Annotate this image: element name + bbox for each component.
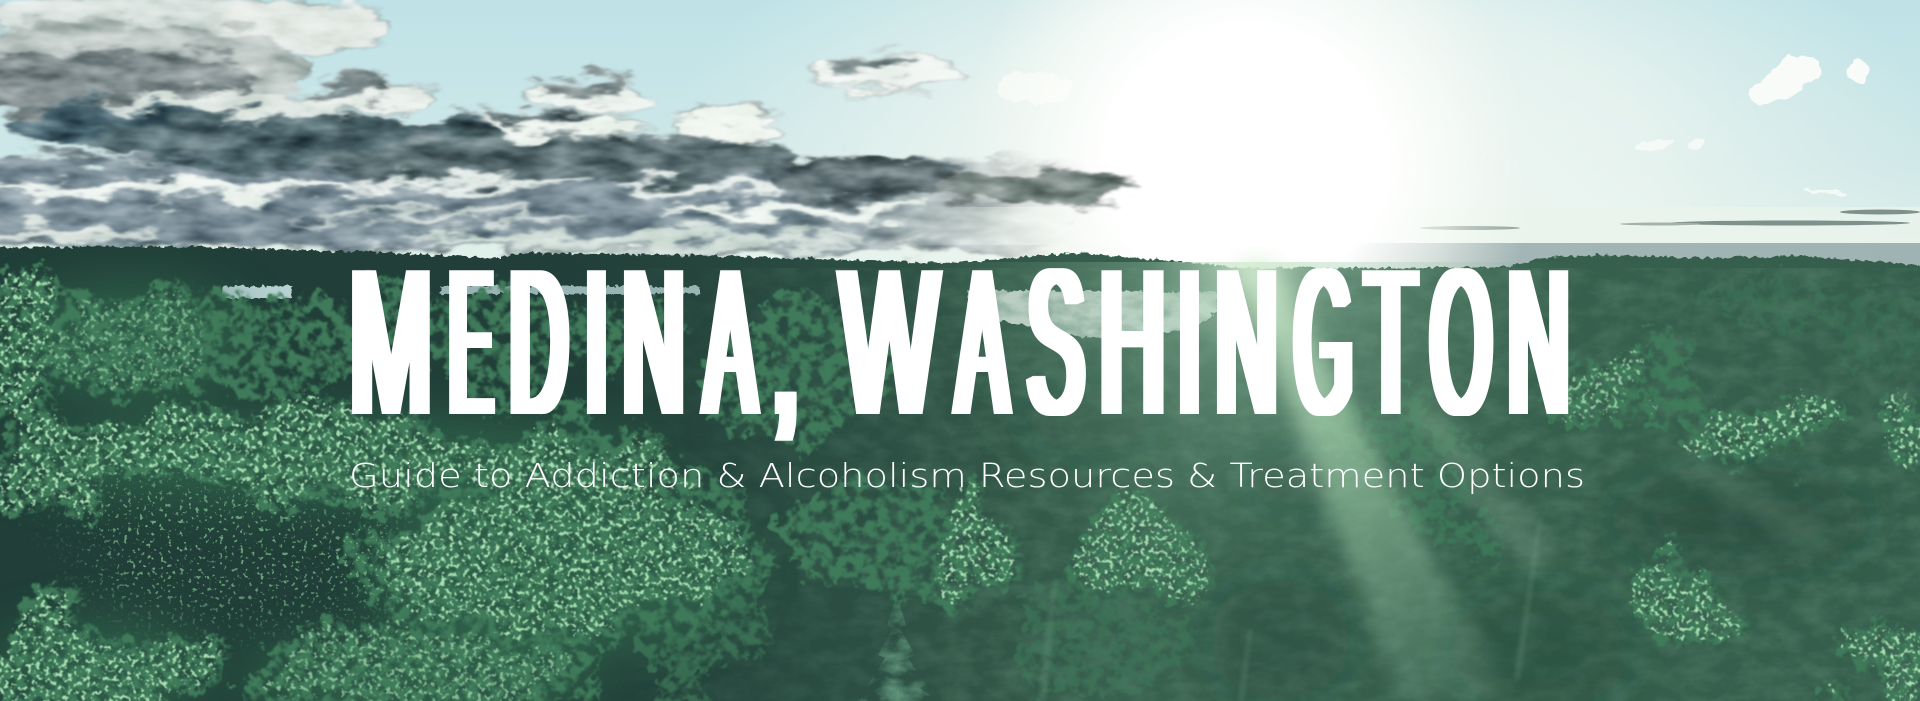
title: , xyxy=(771,226,800,459)
cloud against the sun xyxy=(935,168,1135,204)
title: W xyxy=(841,226,938,459)
title: N xyxy=(1216,226,1277,459)
sun core xyxy=(950,0,1540,290)
pale tree trunks xyxy=(1038,520,1542,701)
title: S xyxy=(1028,226,1084,459)
subtitle: Guide to Addiction & Alcoholism Resources & Treatment Options xyxy=(349,456,1585,495)
title: I xyxy=(1179,226,1200,459)
distant tree line xyxy=(0,246,1920,701)
fir tree xyxy=(858,595,938,701)
title: E xyxy=(450,226,492,459)
clouds xyxy=(0,0,1100,250)
soft foliage underlayer xyxy=(0,280,750,701)
title: T xyxy=(1366,226,1416,459)
title: M xyxy=(350,226,432,459)
sun rays xyxy=(1236,262,1840,701)
sky xyxy=(0,0,1920,280)
title: G xyxy=(1295,226,1352,459)
title: A xyxy=(957,226,1007,459)
title: H xyxy=(1100,226,1165,459)
tree canopy masses xyxy=(0,272,1920,701)
title: O xyxy=(1431,226,1491,459)
title: A xyxy=(705,226,755,459)
sun haze over forest xyxy=(920,262,1580,592)
sparse leaf speckles in the shaded area xyxy=(40,476,420,620)
lakes xyxy=(222,286,1217,338)
horizon streaks and far haze band xyxy=(900,207,1920,271)
title: N xyxy=(1508,226,1569,459)
title: D xyxy=(510,226,567,459)
mottled forest texture on the hazy right side xyxy=(0,268,1920,701)
bright foliage highlights xyxy=(0,290,1920,701)
title: N xyxy=(623,226,684,459)
title: I xyxy=(586,226,607,459)
small white clouds on the right xyxy=(997,46,1869,195)
wide sun haze xyxy=(640,0,1920,280)
shadows on the right side xyxy=(1020,390,1860,701)
